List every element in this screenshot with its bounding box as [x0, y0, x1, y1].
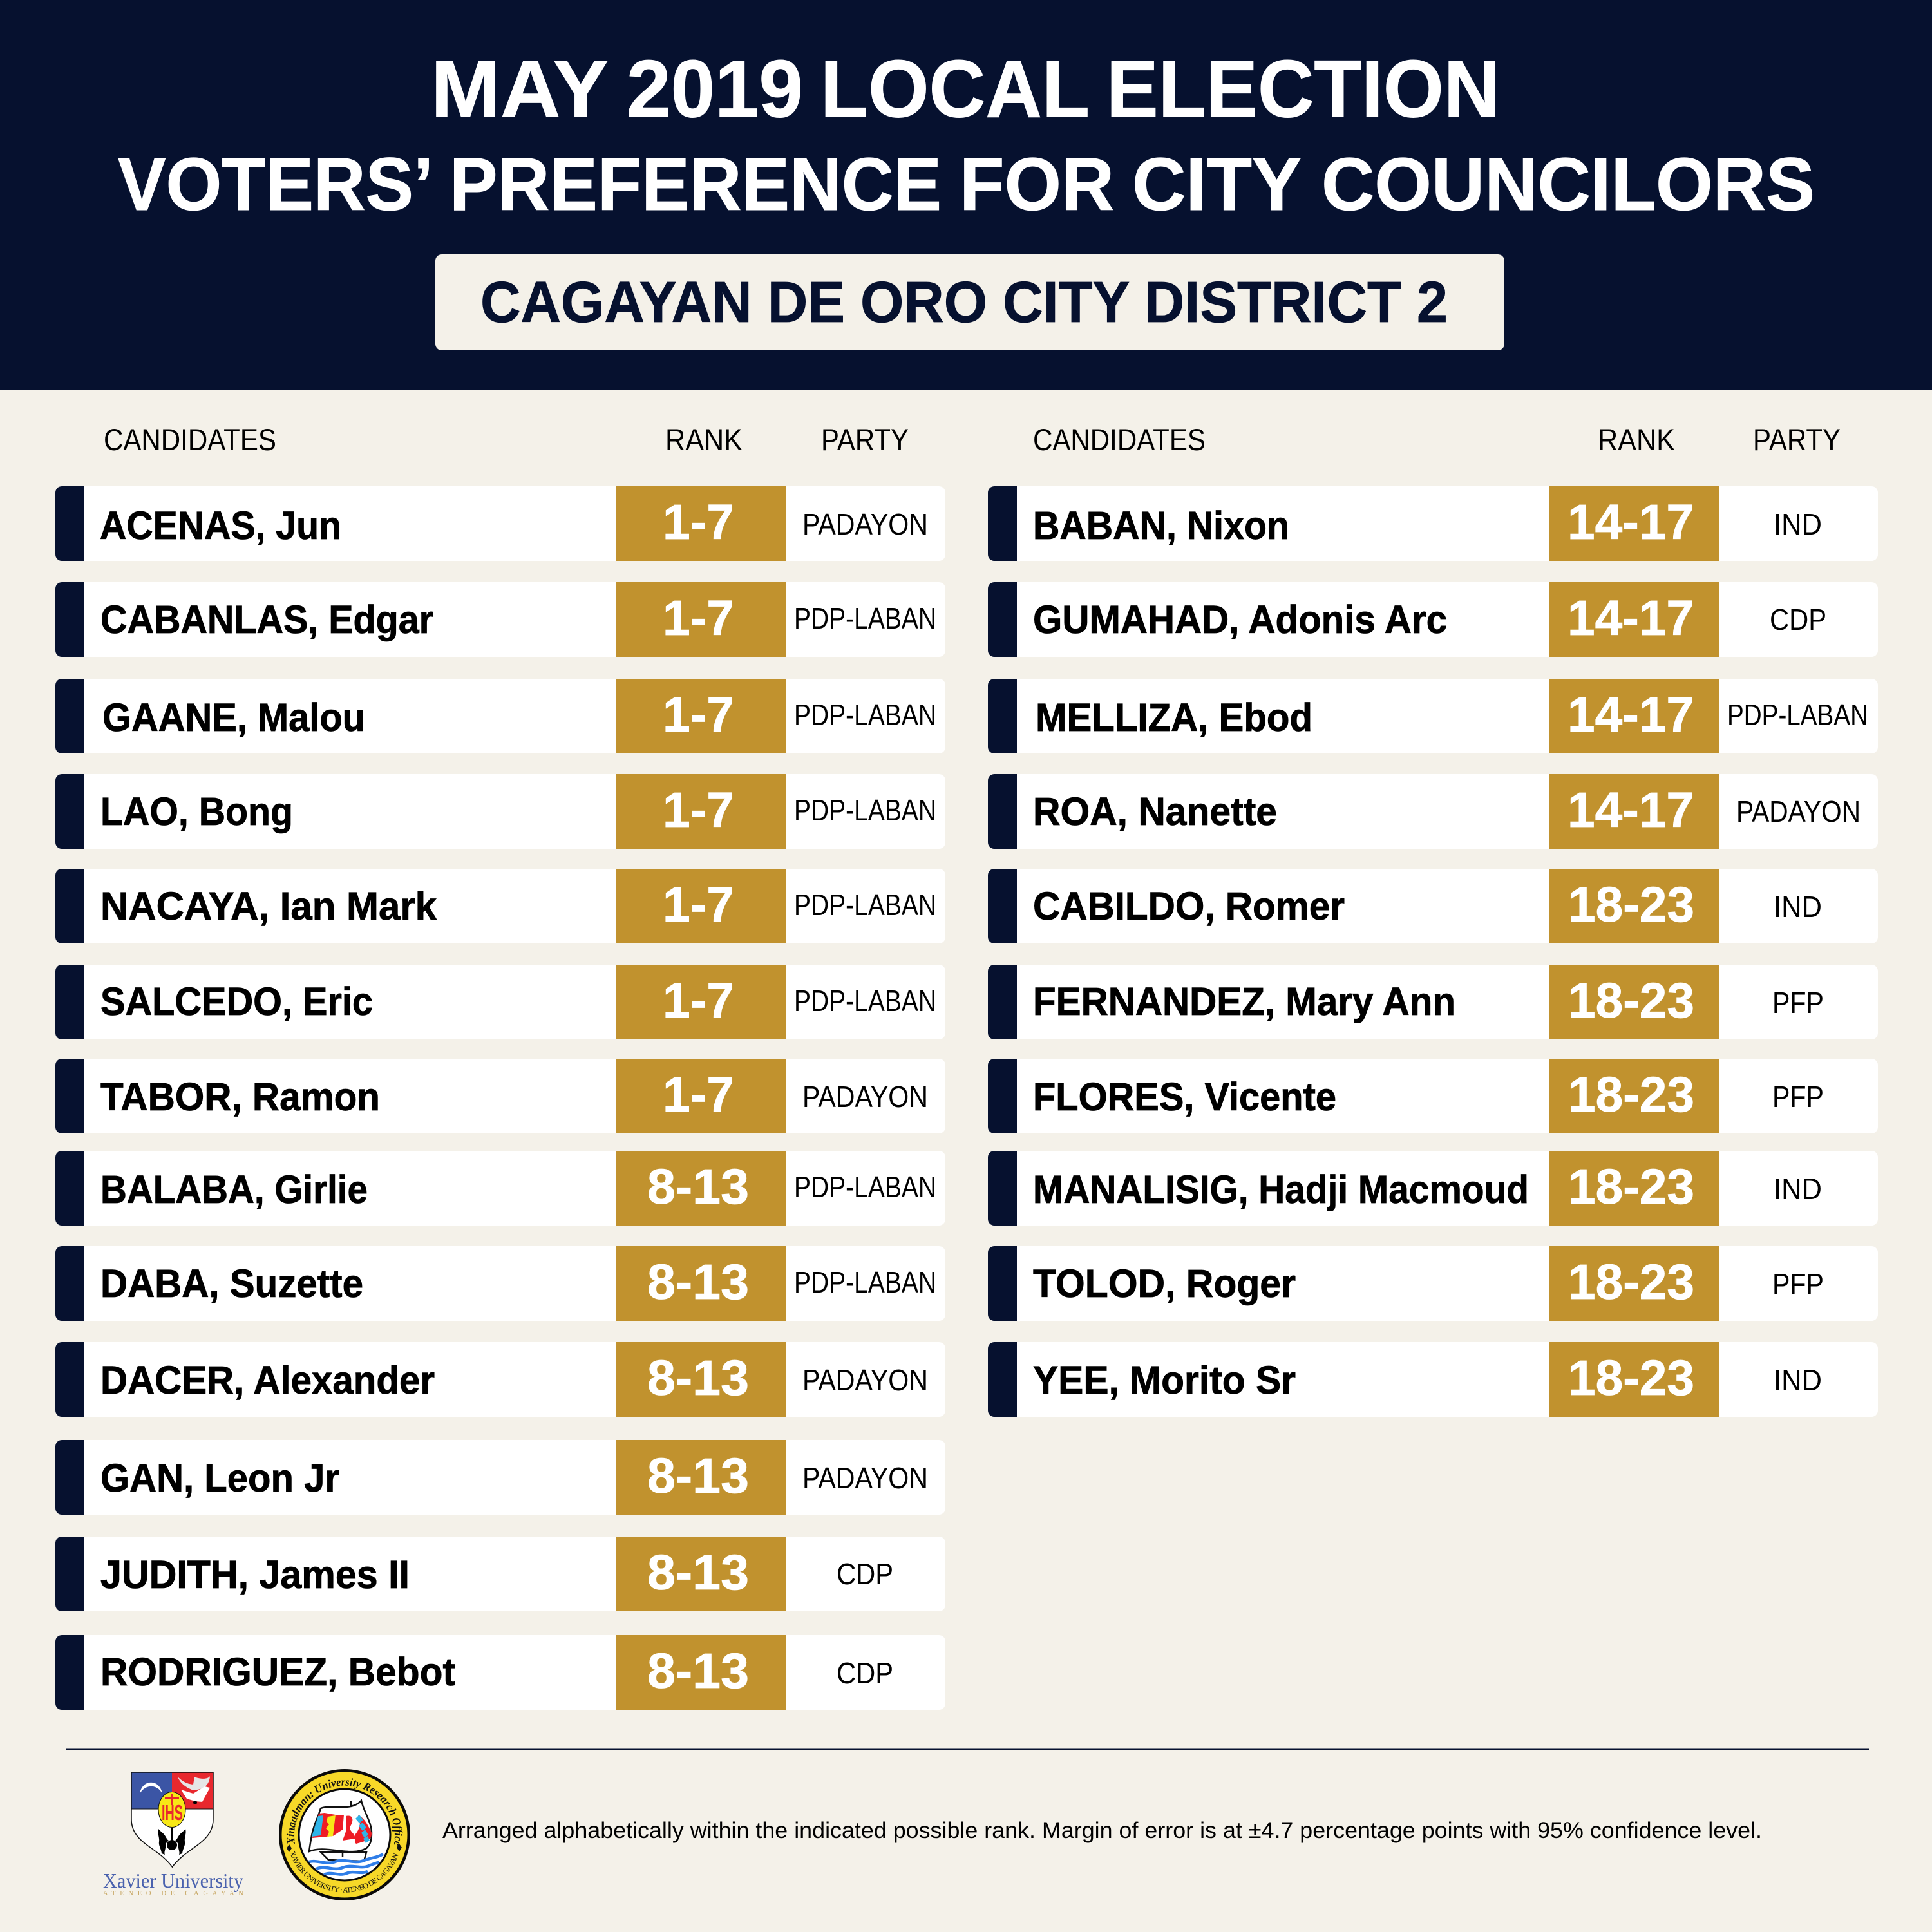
row: CABANLAS: CABANLAS, Edgar [100, 598, 433, 641]
row: MANALISIG: IND [1774, 1172, 1822, 1206]
row: JUDITH [55, 1537, 945, 1611]
row: MELLIZA [988, 679, 1878, 753]
row: CABANLAS [55, 582, 945, 657]
row: GUMAHAD: 14-17 [1567, 591, 1694, 646]
row: JUDITH: CDP [837, 1557, 893, 1591]
row: CABANLAS: 1-7 [663, 591, 734, 646]
row: BABAN: IND [1774, 507, 1822, 541]
row: ACENAS: PADAYON [802, 507, 928, 541]
icon: shield [131, 1772, 213, 1867]
row: GAANE: PDP-LABAN [794, 698, 936, 732]
logo: Xavier University [103, 1772, 243, 1897]
row: ROA [988, 774, 1878, 849]
row: FLORES: PFP [1772, 1080, 1824, 1113]
row: GUMAHAD: CDP [1770, 603, 1826, 636]
row: ACENAS [55, 486, 945, 561]
row: BALABA: BALABA, Girlie [100, 1168, 368, 1211]
logo: research office seal [279, 1769, 410, 1900]
row: GAN: GAN, Leon Jr [100, 1456, 339, 1500]
row: YEE [988, 1342, 1878, 1417]
row: DABA [55, 1246, 945, 1321]
row: TOLOD: 18-23 [1568, 1255, 1694, 1310]
title line 1: 2019 [627, 44, 803, 134]
tagline: ATENEO DE CAGAYAN [103, 1890, 243, 1897]
title line 2: FOR [960, 142, 1114, 226]
row: FERNANDEZ: PFP [1772, 986, 1824, 1019]
title line 2: CITY [1132, 142, 1302, 226]
row: DACER: 8-13 [647, 1350, 749, 1406]
row: ROA: ROA, Nanette [1033, 790, 1277, 833]
row: JUDITH: JUDITH, James II [100, 1553, 410, 1596]
row: FERNANDEZ: FERNANDEZ, Mary Ann [1033, 980, 1455, 1023]
row: FERNANDEZ: 18-23 [1568, 973, 1694, 1028]
row: NACAYA [55, 869, 945, 943]
row: BABAN: BABAN, Nixon [1033, 504, 1289, 547]
subtitle box: CAGAYAN DE ORO CITY DISTRICT 2 [480, 270, 1448, 335]
header banner [0, 0, 1932, 390]
title line 1: LOCAL [820, 44, 1090, 134]
icon: diamonds [287, 1844, 402, 1852]
row: GAANE [55, 679, 945, 753]
row: FLORES: 18-23 [1568, 1067, 1694, 1122]
row: CABILDO: IND [1774, 890, 1822, 923]
row: GUMAHAD: GUMAHAD, Adonis Arc [1033, 598, 1447, 641]
left table [55, 422, 945, 1710]
right column headers: PARTY [1753, 422, 1841, 457]
left column headers: PARTY [821, 422, 909, 457]
title line 2: COUNCILORS [1321, 142, 1815, 226]
row: SALCEDO: PDP-LABAN [794, 984, 936, 1018]
row: LAO: LAO, Bong [100, 790, 293, 833]
left column headers: RANK [665, 422, 743, 457]
title line 2: VOTERS’ [118, 142, 433, 226]
row: MELLIZA: MELLIZA, Ebod [1036, 696, 1312, 739]
title line 2 [118, 142, 1815, 226]
row: YEE: IND [1774, 1363, 1822, 1397]
title line 1 [431, 44, 1500, 134]
icon: IHS oval: IHS [162, 1801, 183, 1824]
row: ROA: 14-17 [1567, 782, 1694, 838]
row: RODRIGUEZ: 8-13 [647, 1643, 749, 1699]
row: RODRIGUEZ: CDP [837, 1656, 893, 1690]
row: LAO [55, 774, 945, 849]
row: FERNANDEZ [988, 965, 1878, 1039]
row: NACAYA: 1-7 [663, 877, 734, 933]
row: NACAYA: NACAYA, Ian Mark [100, 884, 437, 928]
row: MELLIZA: PDP-LABAN [1727, 698, 1868, 732]
row: DACER [55, 1342, 945, 1417]
row: TOLOD [988, 1246, 1878, 1321]
row: LAO: 1-7 [663, 782, 734, 838]
row: MANALISIG: MANALISIG, Hadji Macmoud [1033, 1168, 1529, 1211]
row: YEE: 18-23 [1568, 1350, 1694, 1406]
row: GAN [55, 1440, 945, 1515]
seal arc text top: Xinaadman: University Research Office [286, 1778, 403, 1846]
title line 1: MAY [431, 44, 609, 134]
left column headers [104, 422, 909, 457]
row: MANALISIG: 18-23 [1568, 1159, 1694, 1215]
row: TABOR [55, 1059, 945, 1133]
seal arc text bottom: XAVIER UNIVERSITY · ATENEO DE CAGAYAN [290, 1851, 398, 1893]
icon: ship [306, 1801, 383, 1875]
row: TABOR: 1-7 [663, 1067, 734, 1122]
row: BABAN [988, 486, 1878, 561]
right table [988, 422, 1878, 1417]
row: DABA: 8-13 [647, 1255, 749, 1310]
icon: IHS oval [158, 1792, 185, 1828]
row: YEE: YEE, Morito Sr [1033, 1358, 1296, 1402]
row: DABA: DABA, Suzette [100, 1262, 363, 1305]
row: JUDITH: 8-13 [647, 1545, 749, 1600]
row: CABILDO [988, 869, 1878, 943]
row: NACAYA: PDP-LABAN [794, 888, 936, 922]
row: BABAN: 14-17 [1567, 495, 1694, 550]
row: DACER: PADAYON [802, 1363, 928, 1397]
row: CABILDO: CABILDO, Romer [1033, 884, 1345, 928]
icon: wolves and pot [158, 1828, 186, 1855]
row: SALCEDO: SALCEDO, Eric [100, 980, 373, 1023]
title line 1: ELECTION [1106, 44, 1500, 134]
row: TABOR: PADAYON [802, 1080, 928, 1113]
row: CABILDO: 18-23 [1568, 877, 1694, 933]
row: BALABA: PDP-LABAN [794, 1170, 936, 1204]
row: BALABA [55, 1151, 945, 1226]
row: TABOR: TABOR, Ramon [100, 1075, 380, 1119]
row: SALCEDO: 1-7 [663, 973, 734, 1028]
row: ACENAS: 1-7 [663, 495, 734, 550]
row: DABA: PDP-LABAN [794, 1265, 936, 1299]
right column headers: RANK [1598, 422, 1675, 457]
row: GAANE: 1-7 [663, 687, 734, 743]
row: DACER: DACER, Alexander [100, 1358, 435, 1402]
row: BALABA: 8-13 [647, 1159, 749, 1215]
row: GAANE: GAANE, Malou [102, 696, 365, 739]
row: GUMAHAD [988, 582, 1878, 657]
row: FLORES [988, 1059, 1878, 1133]
row: MELLIZA: 14-17 [1567, 687, 1694, 743]
row: GAN: 8-13 [647, 1448, 749, 1504]
right column headers [1033, 422, 1841, 457]
footnote: Arranged alphabetically within the indicated possible rank. Margin of error is at ±4.7 percentage points with 95% confidence level. [442, 1818, 1762, 1843]
row: FLORES: FLORES, Vicente [1033, 1075, 1336, 1119]
row: MANALISIG [988, 1151, 1878, 1226]
right column headers: CANDIDATES [1033, 422, 1206, 457]
wordmark: Xavier University [103, 1869, 243, 1892]
row: ROA: PADAYON [1736, 795, 1861, 828]
row: GAN: PADAYON [802, 1461, 928, 1495]
subtitle box [435, 254, 1504, 350]
row: LAO: PDP-LABAN [794, 793, 936, 827]
row: TOLOD: TOLOD, Roger [1033, 1262, 1296, 1305]
row: CABANLAS: PDP-LABAN [794, 601, 936, 635]
row: RODRIGUEZ [55, 1635, 945, 1710]
left column headers: CANDIDATES [104, 422, 276, 457]
row: SALCEDO [55, 965, 945, 1039]
title line 2: PREFERENCE [450, 142, 942, 226]
row: TOLOD: PFP [1772, 1267, 1824, 1301]
row: ACENAS: ACENAS, Jun [100, 504, 341, 547]
row: RODRIGUEZ: RODRIGUEZ, Bebot [100, 1650, 455, 1694]
